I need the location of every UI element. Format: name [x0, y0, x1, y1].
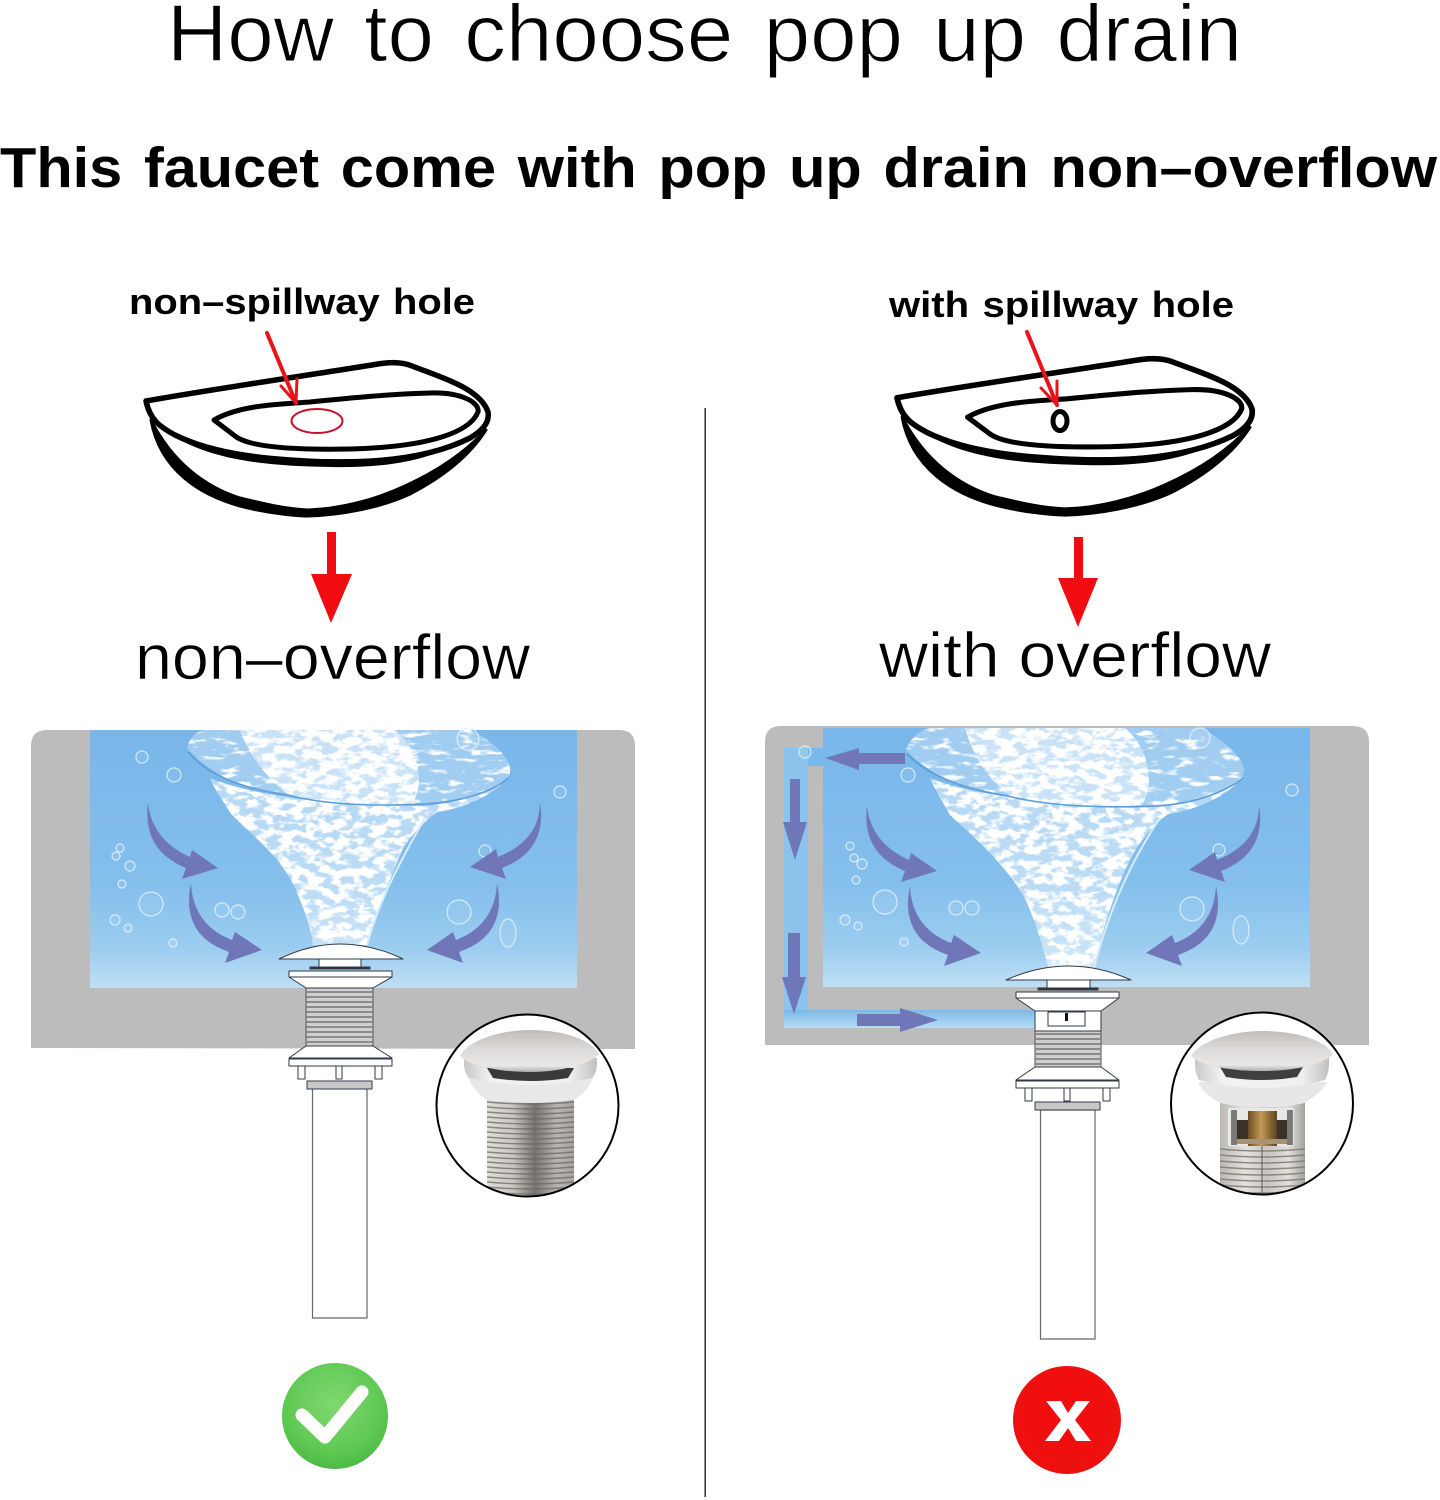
heading: non-overflow: non–overflow — [135, 623, 531, 693]
slot window — [1228, 1108, 1294, 1146]
pipe — [1040, 1110, 1095, 1339]
panel: with overflow column — [765, 284, 1369, 1474]
icon: sink with spillway hole — [897, 359, 1252, 515]
arrow: red down — [311, 532, 352, 623]
panel: sink basin cross section — [31, 728, 635, 1049]
cap — [279, 944, 403, 959]
center divider — [704, 408, 706, 1497]
lower flange — [1016, 1067, 1119, 1080]
upper flange — [1016, 992, 1119, 998]
skirt — [1198, 1082, 1327, 1108]
cap — [1006, 966, 1131, 980]
label: non-spillway hole: non–spillway hole — [129, 281, 475, 322]
skirt — [468, 1077, 593, 1103]
whirlpool — [906, 728, 1244, 968]
arrow: pointer to sink — [1027, 332, 1057, 405]
icon: green check — [282, 1363, 388, 1469]
nut posts — [1025, 1088, 1110, 1101]
callout: chrome drain closeup with overflow slot — [1171, 1012, 1353, 1200]
flange — [1195, 1058, 1329, 1088]
icon: red cross — [1013, 1366, 1121, 1474]
label: with spillway hole: with spillway hole — [888, 284, 1234, 325]
lower flange — [289, 1046, 392, 1058]
arrows: inward flow — [866, 805, 1260, 966]
flange — [464, 1058, 597, 1085]
upper flange — [289, 971, 392, 977]
cap dome — [460, 1030, 599, 1072]
shadow gap — [487, 1068, 574, 1081]
bubbles — [799, 728, 1298, 946]
drain assembly — [1006, 966, 1131, 1339]
nut posts — [298, 1066, 382, 1079]
water — [823, 728, 1310, 987]
overflow channel — [784, 748, 824, 766]
icon: sink without spillway hole — [146, 363, 488, 516]
callout: chrome drain closeup — [436, 1014, 618, 1200]
pipe — [312, 1088, 367, 1318]
bubbles — [110, 728, 566, 947]
threaded body — [1035, 1030, 1101, 1068]
panel: non-overflow column — [31, 281, 635, 1469]
threads — [487, 1095, 574, 1200]
arrow: pointer to sink — [267, 333, 297, 403]
arrows: inward flow — [147, 802, 541, 963]
body — [1220, 1103, 1305, 1194]
threaded body — [306, 988, 373, 1046]
icon: red outline of missing hole — [292, 409, 342, 433]
window body — [1035, 1010, 1101, 1031]
shadow gap — [1220, 1067, 1303, 1080]
arrow: red down — [1058, 537, 1098, 627]
heading: with overflow: with overflow — [878, 621, 1272, 691]
whirlpool — [187, 730, 510, 945]
cap dome — [1191, 1031, 1333, 1071]
subtitle: This faucet come with pop up drain non–overflow — [0, 136, 1438, 200]
panel: sink basin cross section with overflow channel — [765, 726, 1369, 1045]
icon: drain hole — [1053, 412, 1067, 430]
arrows: overflow path — [782, 748, 938, 1032]
threads — [1220, 1149, 1305, 1193]
drain assembly — [279, 944, 403, 1318]
water — [90, 730, 577, 988]
